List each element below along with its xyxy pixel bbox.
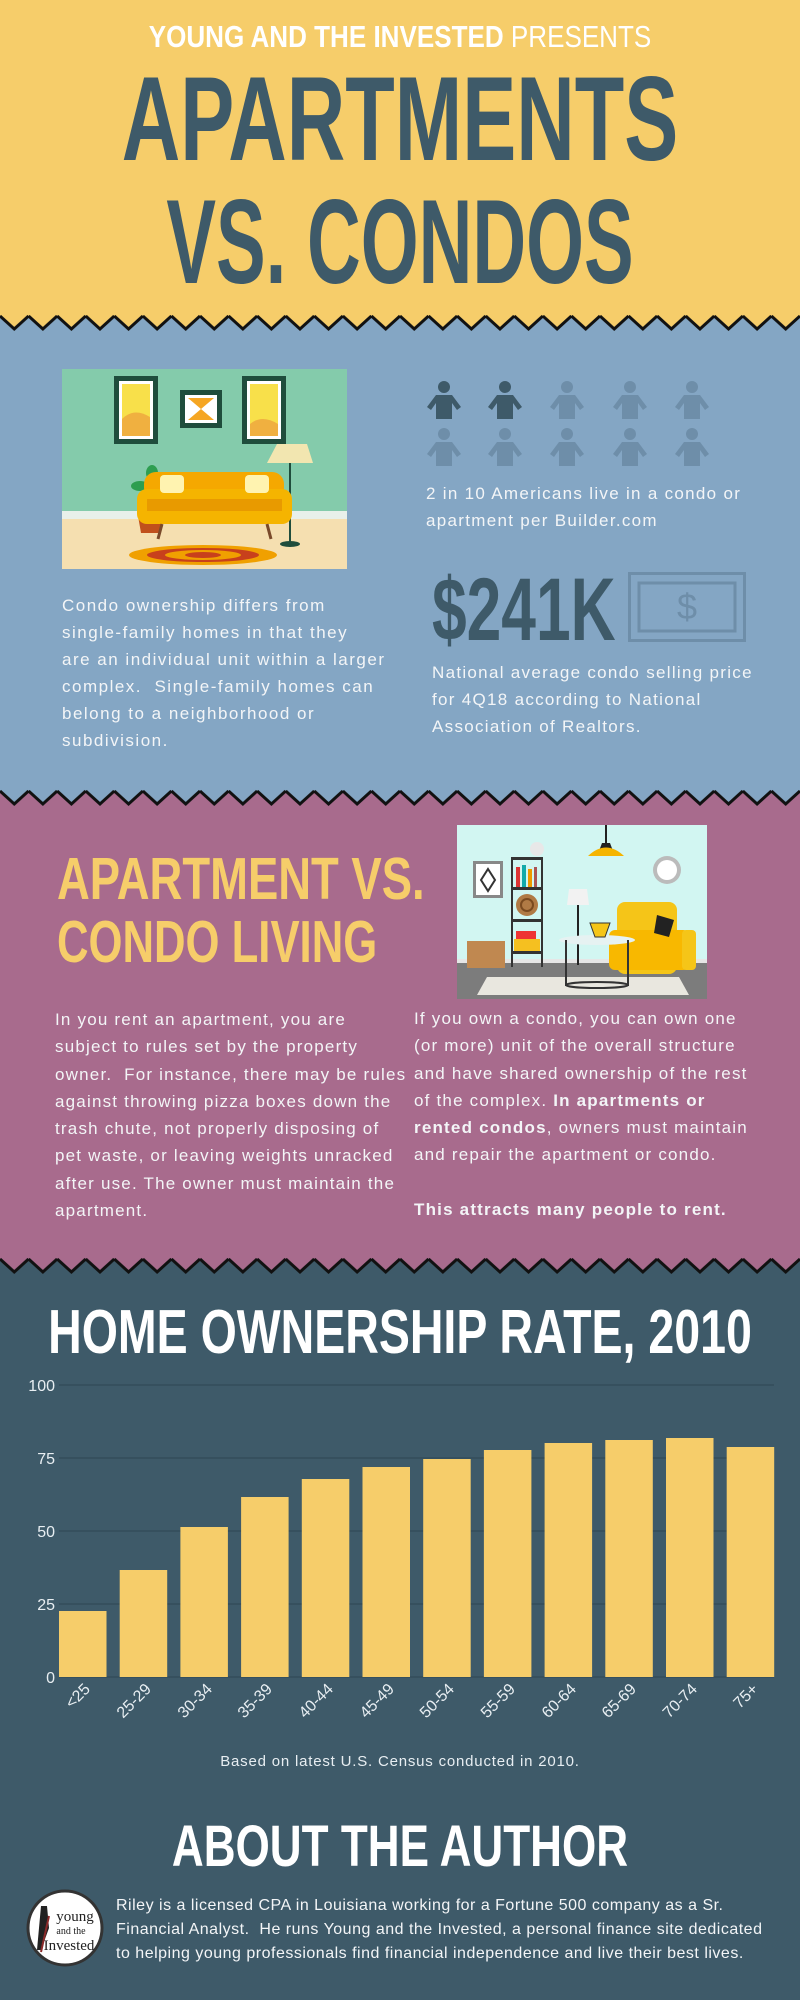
- paragraph: renting an apartment: trash chute, not properly disposing of: [55, 1119, 379, 1138]
- stat: $241K: $241K: [432, 559, 616, 659]
- paragraph: condo ownership: Condo ownership differs from: [62, 596, 326, 615]
- bar chart: home ownership by age: 45-49: [357, 1681, 398, 1722]
- stat text: price: National average condo selling price: [432, 663, 753, 682]
- heading: apartment vs condo living: APARTMENT VS.: [57, 846, 425, 912]
- author bio: to helping young professionals find financial independence and live their best lives.: [116, 1945, 744, 1962]
- bar chart: home ownership by age: 25: [37, 1597, 55, 1614]
- logo: young and the invested: [26, 1890, 104, 1966]
- paragraph: owning a condo: If you own a condo, you can own one: [414, 1009, 737, 1028]
- logo: young and the invested: Invested: [44, 1938, 95, 1954]
- bar chart: home ownership by age: 0: [46, 1670, 55, 1687]
- paragraph: owning a condo: rented condos, owners must maintain: [414, 1118, 748, 1137]
- icon: dollar bill: [628, 572, 746, 642]
- zigzag divider 2: [0, 790, 800, 806]
- paragraph: renting an apartment: [55, 1010, 406, 1220]
- bar chart: home ownership by age: 75+: [731, 1681, 762, 1712]
- author bio: Financial Analyst. He runs Young and the Invested, a personal finance site dedicated: [116, 1921, 762, 1938]
- bar chart: home ownership by age: 50: [37, 1524, 55, 1541]
- author bio: Riley is a licensed CPA in Louisiana working for a Fortune 500 company as a Sr.: [116, 1897, 724, 1914]
- paragraph: renting an apartment: after use. The owner must maintain the: [55, 1174, 395, 1193]
- bar chart: home ownership by age: 25-29: [114, 1681, 155, 1722]
- title line 2: VS. CONDOS: [166, 175, 634, 309]
- stat text: 2 in 10: [426, 484, 741, 530]
- zigzag divider 3: [0, 1258, 800, 1274]
- paragraph: renting an apartment: apartment.: [55, 1201, 148, 1220]
- stat text: price: for 4Q18 according to National: [432, 690, 702, 709]
- paragraph: condo ownership: [62, 596, 386, 750]
- stat text: 2 in 10: apartment per Builder.com: [426, 511, 658, 530]
- footnote: Based on latest U.S. Census conducted in 2010.: [220, 1753, 580, 1770]
- bar chart: home ownership by age: 75: [37, 1451, 55, 1468]
- logo: young and the invested: and the: [56, 1926, 86, 1937]
- paragraph: renting an apartment: subject to rules set by the property: [55, 1037, 358, 1056]
- bar chart: home ownership by age: 55-59: [478, 1681, 519, 1722]
- presenter line: YOUNG AND THE INVESTED PRESENTS: [149, 19, 651, 54]
- illustration: living room: [62, 369, 347, 569]
- paragraph: owning a condo: and have shared ownership of the rest: [414, 1064, 748, 1083]
- heading: about the author: ABOUT THE AUTHOR: [172, 1814, 628, 1879]
- paragraph: condo ownership: are an individual unit within a larger: [62, 650, 386, 669]
- paragraph: owning a condo: and repair the apartment or condo.: [414, 1145, 717, 1164]
- paragraph: owning a condo: This attracts many people to rent.: [414, 1200, 727, 1219]
- heading: apartment vs condo living: CONDO LIVING: [57, 909, 377, 975]
- bar chart: home ownership by age: 60-64: [539, 1681, 580, 1722]
- section: blue stats: [0, 322, 800, 794]
- bar chart: home ownership by age: 65-69: [599, 1681, 640, 1722]
- paragraph: condo ownership: complex. Single-family homes can: [62, 677, 374, 696]
- section: yellow header: [0, 0, 800, 322]
- bar chart: home ownership by age: 30-34: [175, 1681, 216, 1722]
- author bio: [116, 1897, 762, 1962]
- logo: young and the invested: young: [56, 1909, 94, 1925]
- paragraph: condo ownership: belong to a neighborhood or: [62, 704, 315, 723]
- title line 1: APARTMENTS: [122, 52, 678, 186]
- icon array: 2 in 10 people: [427, 381, 709, 466]
- paragraph: condo ownership: single-family homes in that they: [62, 623, 348, 642]
- section: pink living: [0, 794, 800, 1265]
- paragraph: renting an apartment: pet waste, or leaving weights unracked: [55, 1146, 394, 1165]
- stat text: price: Association of Realtors.: [432, 717, 642, 736]
- paragraph: owning a condo: (or more) unit of the overall structure: [414, 1036, 736, 1055]
- stat text: 2 in 10: 2 in 10 Americans live in a condo or: [426, 484, 741, 503]
- stat text: price: [432, 663, 753, 736]
- bar chart: home ownership by age: [28, 1378, 774, 1722]
- paragraph: renting an apartment: against throwing pizza boxes down the: [55, 1092, 391, 1111]
- paragraph: owning a condo: [414, 1009, 748, 1219]
- paragraph: owning a condo: of the complex. In apartments or: [414, 1091, 706, 1110]
- paragraph: condo ownership: subdivision.: [62, 731, 169, 750]
- zigzag divider 1: [0, 314, 800, 331]
- bar chart: home ownership by age: 35-39: [235, 1681, 276, 1722]
- paragraph: renting an apartment: In you rent an apartment, you are: [55, 1010, 346, 1029]
- chart title: HOME OWNERSHIP RATE, 2010: [48, 1298, 752, 1367]
- illustration: modern living room: [457, 825, 707, 999]
- bar chart: home ownership by age: <25: [63, 1681, 94, 1712]
- icon: dollar bill: $: [677, 586, 697, 627]
- bar chart: home ownership by age: 100: [28, 1378, 55, 1395]
- heading: apartment vs condo living: [57, 846, 425, 975]
- paragraph: renting an apartment: owner. For instance, there may be rules: [55, 1065, 406, 1084]
- bar chart: home ownership by age: 40-44: [296, 1681, 337, 1722]
- bar chart: home ownership by age: 70-74: [660, 1681, 701, 1722]
- bar chart: home ownership by age: 50-54: [417, 1681, 458, 1722]
